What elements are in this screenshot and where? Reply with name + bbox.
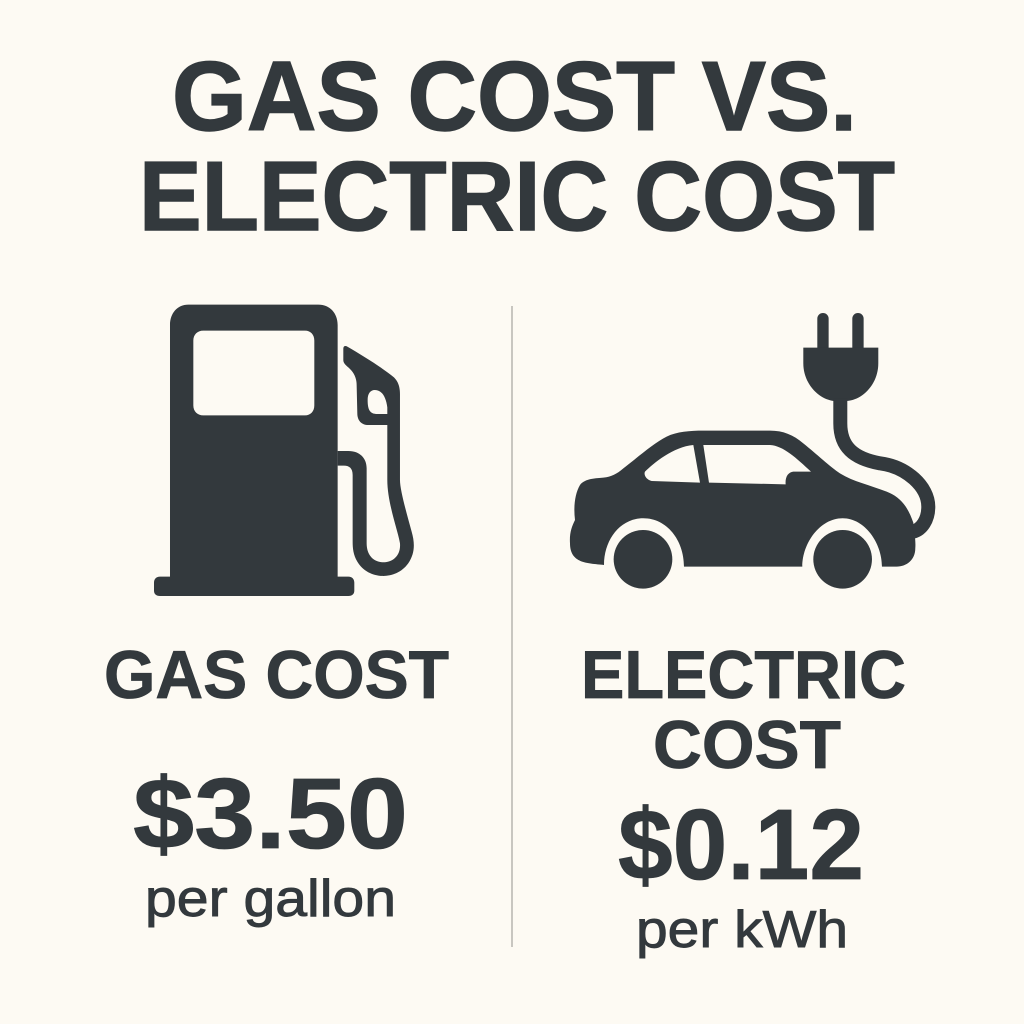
heading: electric cost <box>581 637 906 783</box>
gas unit: per gallon <box>145 870 396 928</box>
plug head <box>803 348 878 401</box>
title: GAS COST VS. <box>172 41 857 151</box>
title <box>139 41 895 251</box>
front wheel <box>813 530 872 589</box>
plug prongs <box>823 319 858 350</box>
divider <box>511 306 513 947</box>
electric unit: per kWh <box>636 901 848 959</box>
gas price: $3.50 <box>133 758 408 870</box>
icon: electric car with plug <box>570 319 928 589</box>
heading: electric cost: COST <box>653 707 841 783</box>
icon: gas pump <box>154 305 414 596</box>
rear wheel <box>614 530 672 589</box>
title: ELECTRIC COST <box>139 141 895 251</box>
car body <box>570 431 915 567</box>
charging cord <box>840 398 928 532</box>
electric price: $0.12 <box>618 789 864 901</box>
heading: electric cost: ELECTRIC <box>581 637 906 713</box>
heading: gas cost: GAS COST <box>104 637 449 713</box>
